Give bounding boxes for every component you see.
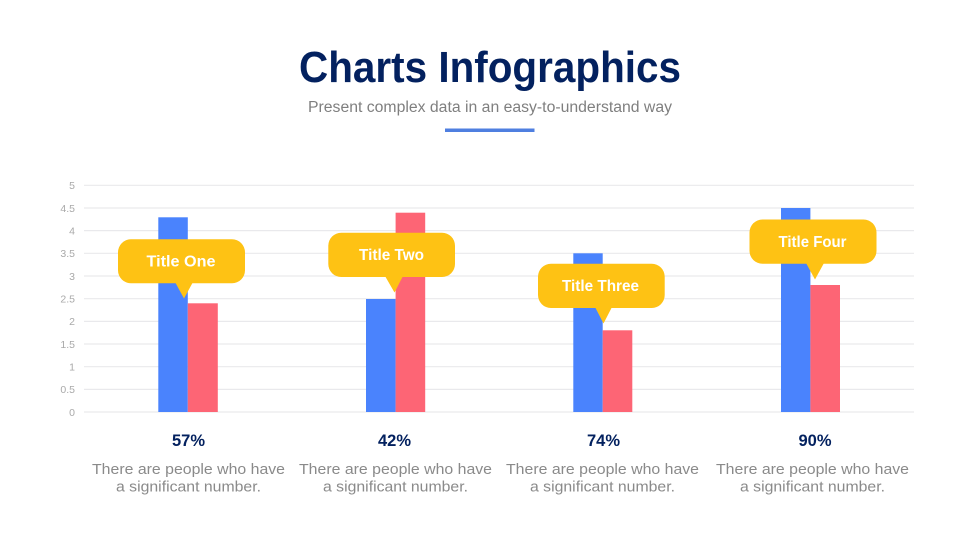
bar chart <box>60 180 914 419</box>
y axis labels: 0 <box>69 407 75 419</box>
bars: group four <box>781 208 840 412</box>
callout: Title Three <box>538 264 665 324</box>
stat: 57%: There are people who have <box>92 461 285 478</box>
stat: 42%: There are people who have <box>299 461 492 478</box>
stat: 90%: There are people who have <box>716 461 909 478</box>
stat: 57%: 57% <box>172 432 205 450</box>
stat: 90%: 90% <box>798 432 832 450</box>
y axis labels: 5 <box>69 180 75 192</box>
stat: 90% <box>716 432 909 496</box>
stat: 74%: a significant number. <box>530 478 675 496</box>
callout: Title Four <box>750 220 876 280</box>
stat: 90%: a significant number. <box>740 478 885 496</box>
title underline <box>445 128 534 132</box>
bars: group three <box>573 253 632 412</box>
y axis labels: 4 <box>69 226 75 238</box>
y axis labels: 3.5 <box>60 248 75 260</box>
y axis labels: 0.5 <box>60 384 75 396</box>
stat: 42%: a significant number. <box>323 478 468 496</box>
stat: 42% <box>299 432 492 496</box>
bars: group two <box>366 213 425 412</box>
stat: 57%: a significant number. <box>116 478 261 496</box>
callout: Title Two: Title Two <box>359 247 424 264</box>
y axis labels: 2 <box>69 316 75 328</box>
y axis labels: 3 <box>69 271 75 283</box>
subtitle: Present complex data in an easy-to-understand way <box>308 99 672 116</box>
callout: Title Three: Title Three <box>562 278 639 295</box>
title: Charts Infographics <box>299 43 681 92</box>
callout: Title Four: Title Four <box>778 234 846 251</box>
y axis labels: 2.5 <box>60 294 75 306</box>
callout: Title One <box>118 239 245 298</box>
stat: 74% <box>506 432 699 496</box>
y axis labels: 4.5 <box>60 203 75 215</box>
callout: Title Two <box>328 233 455 292</box>
stat: 74%: There are people who have <box>506 461 699 478</box>
bars: group one <box>158 217 218 412</box>
y axis labels <box>60 180 75 419</box>
callout: Title One: Title One <box>146 254 216 270</box>
y axis labels: 1.5 <box>60 339 75 351</box>
stat: 57% <box>92 432 285 496</box>
stat: 42%: 42% <box>378 432 411 450</box>
stat: 74%: 74% <box>587 432 620 450</box>
y axis labels: 1 <box>69 362 75 374</box>
